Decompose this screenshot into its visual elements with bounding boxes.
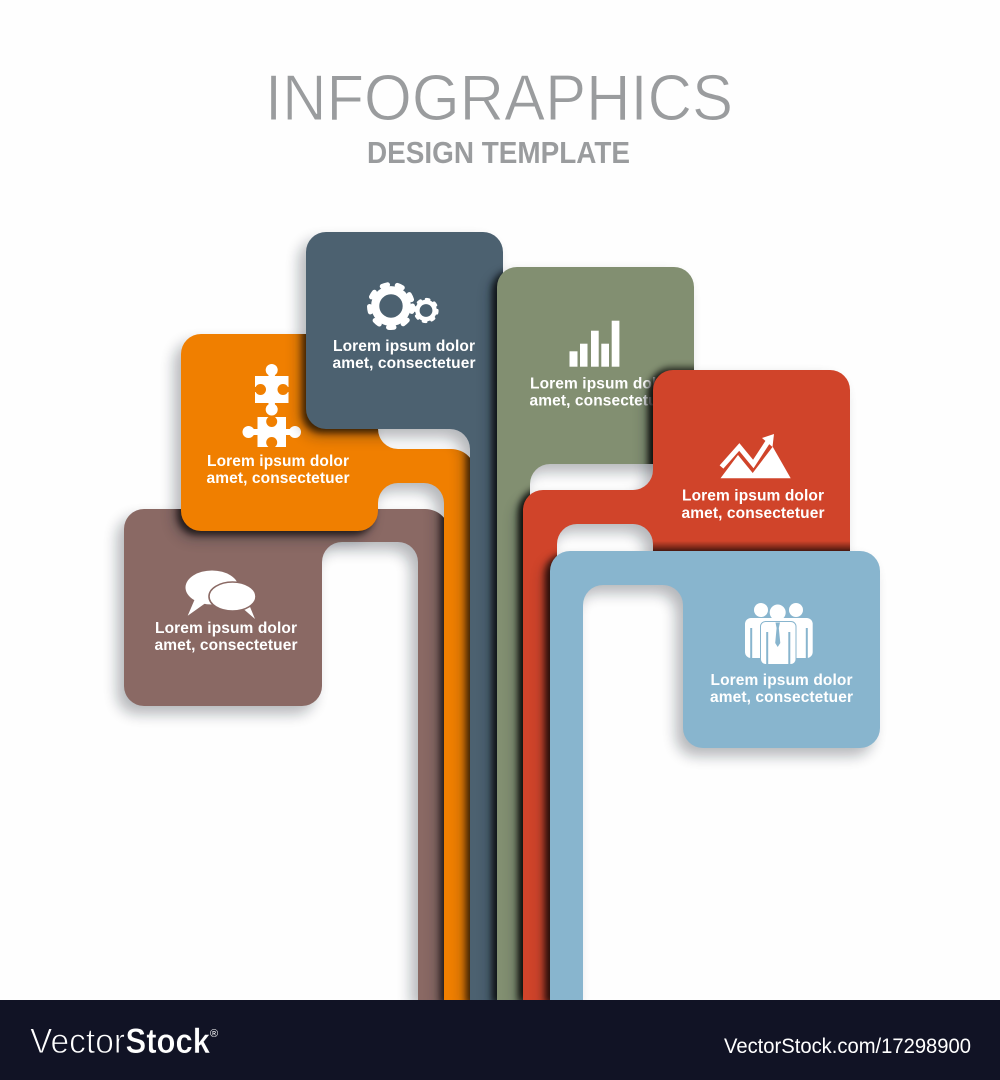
text: blue card: Lorem ipsum dolor — [710, 672, 852, 689]
text: red card second line: amet, consectetuer — [682, 505, 824, 522]
subtitle: DESIGN TEMPLATE — [367, 135, 630, 170]
icon: team of people — [745, 603, 813, 664]
footer logo: ® — [210, 1028, 218, 1040]
panel: blue team card with strip — [543, 541, 880, 1008]
title: INFOGRAPHICS — [265, 61, 733, 134]
panel: green bars card with strip — [490, 267, 694, 1008]
icon: gears — [370, 284, 437, 328]
text: slate card: Lorem ipsum dolor — [333, 338, 475, 355]
panel: brown speech card with strip — [117, 509, 450, 1008]
text: red card: Lorem ipsum dolor — [682, 488, 824, 504]
footer logo — [30, 1022, 218, 1061]
footer logo: Stock — [126, 1022, 210, 1061]
footer bar — [0, 1000, 1000, 1080]
icon: mountain with arrow — [720, 434, 791, 478]
text: green card second line: amet, consectetuer — [530, 392, 672, 410]
panel: red growth card with strip — [516, 367, 850, 1008]
icon: speech bubbles — [186, 570, 256, 619]
text: brown card second line: amet, consectetuer — [154, 637, 298, 654]
icon: puzzle pieces — [242, 364, 301, 448]
text: blue card second line: amet, consectetuer — [710, 689, 853, 706]
text: green card: Lorem ipsum dolor — [530, 376, 672, 392]
icon: bar chart — [570, 321, 619, 367]
footer url: VectorStock.com/17298900 — [724, 1035, 971, 1058]
panel: orange puzzle card with strip — [174, 334, 476, 1008]
text: brown card: Lorem ipsum dolor — [155, 620, 297, 637]
footer logo: Vector — [30, 1022, 125, 1061]
panel: slate gears card with strip — [299, 232, 503, 1008]
text: slate card second line: amet, consectetuer — [332, 355, 476, 372]
text: orange card: Lorem ipsum dolor — [207, 453, 349, 470]
text: orange card second line: amet, consectetuer — [206, 470, 350, 487]
